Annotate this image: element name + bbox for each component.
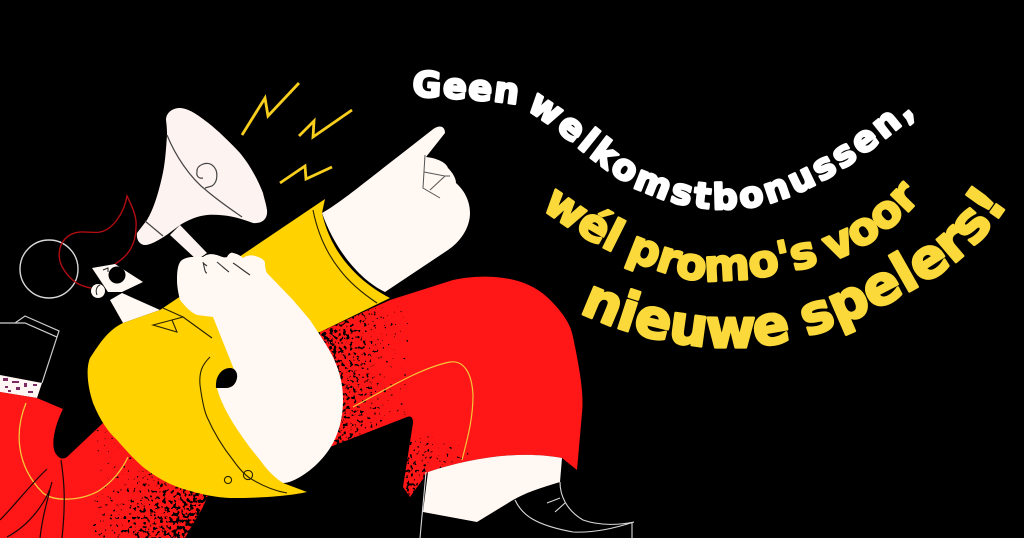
headline line 3: nieuwe spelers!: [582, 186, 1006, 349]
speckle on torso: [90, 430, 210, 538]
headline line 1: Geen welkomstbonussen,: [413, 70, 914, 211]
knuckle lines: [203, 262, 250, 275]
bolt middle: [299, 110, 352, 137]
neck: [110, 293, 160, 323]
megaphone: [137, 108, 267, 245]
sound bolts: [242, 83, 352, 183]
circle outline behind the head: [20, 240, 78, 298]
red torso: [0, 392, 210, 538]
knob line: [145, 221, 163, 236]
speckled shirt stripe: [0, 375, 42, 398]
finger sketch lines: [423, 155, 450, 198]
red trousers: [320, 277, 583, 497]
trousers yellow seam: [353, 362, 473, 460]
hair outline: [59, 196, 136, 288]
ear: [91, 284, 105, 298]
holding arm: [177, 253, 343, 483]
illustration: person shouting through a megaphone: [0, 83, 634, 538]
megaphone bell: [137, 108, 267, 245]
sleeve seam with buttons: [153, 308, 287, 493]
megaphone handle: [170, 225, 207, 260]
white trouser cuff: [423, 455, 562, 522]
elbow gap: [216, 368, 237, 388]
sleeve cuff line: [313, 210, 377, 303]
speaker spiral: [197, 163, 217, 188]
bolt lower: [280, 166, 332, 183]
shirt outline: [0, 316, 59, 383]
torso yellow seam: [19, 403, 128, 499]
bolt top: [242, 83, 299, 135]
headline line 2: wél promo's voor: [546, 180, 915, 282]
mouth: [108, 266, 126, 284]
yellow lower sleeve: [88, 300, 307, 498]
speckle on trousers: [318, 305, 470, 500]
leg and shoe outlines: [420, 472, 634, 538]
yellow upper sleeve: [160, 199, 390, 350]
bell rim line: [167, 135, 242, 217]
face: [91, 264, 143, 298]
nose line: [96, 268, 108, 295]
torso black creases: [0, 460, 64, 538]
pointing forearm and hand: [322, 127, 470, 292]
